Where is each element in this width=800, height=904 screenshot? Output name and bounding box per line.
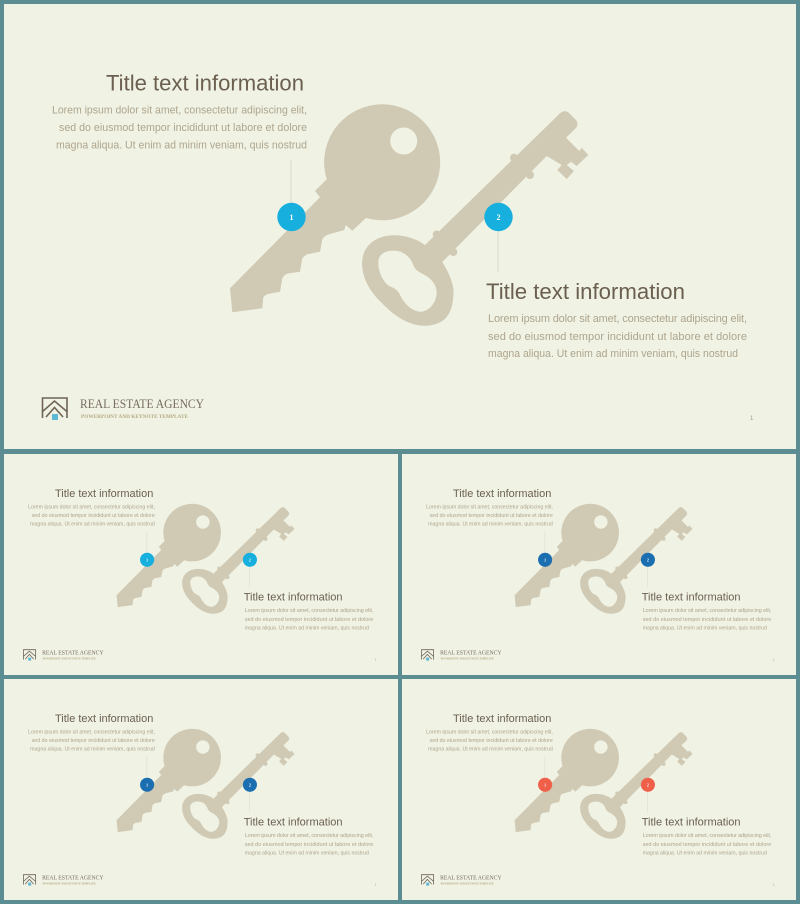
- heading: top left title: Title text information: [453, 713, 551, 725]
- logo: POWERPOINT AND KEYNOTE TEMPLATE: [441, 883, 494, 886]
- text block: bottom right body: magna aliqua. Ut enim ad minim veniam, quis nostrud: [643, 625, 767, 631]
- text block: top left body: [426, 729, 553, 753]
- marker 1: [538, 756, 552, 792]
- text block: bottom right body: magna aliqua. Ut enim ad minim veniam, quis nostrud: [643, 850, 767, 856]
- text block: bottom right body: sed do eiusmod tempor incididunt ut labore et dolore: [245, 616, 373, 622]
- marker 1: [140, 531, 154, 566]
- text block: top left body: Lorem ipsum dolor sit amet, consectetur adipiscing elit,: [28, 729, 155, 735]
- text block: top left body: Lorem ipsum dolor sit amet, consectetur adipiscing elit,: [426, 504, 553, 510]
- marker 2: 2: [496, 213, 500, 222]
- text block: bottom right body: [245, 833, 374, 856]
- text block: bottom right body: Lorem ipsum dolor sit amet, consectetur adipiscing elit,: [245, 607, 374, 613]
- logo: REAL ESTATE AGENCY: [440, 649, 502, 656]
- logo: POWERPOINT AND KEYNOTE TEMPLATE: [43, 657, 96, 660]
- text block: bottom right body: [245, 607, 374, 631]
- icon: modern key: [515, 729, 619, 832]
- marker 2: [641, 778, 655, 812]
- logo: [23, 649, 104, 660]
- marker 1: 1: [544, 557, 546, 562]
- text block: bottom right body: magna aliqua. Ut enim ad minim veniam, quis nostrud: [245, 625, 369, 631]
- text block: bottom right body: magna aliqua. Ut enim ad minim veniam, quis nostrud: [488, 348, 738, 360]
- text block: bottom right body: Lorem ipsum dolor sit amet, consectetur adipiscing elit,: [643, 833, 772, 839]
- panel: slide variant dark blue top: [402, 454, 796, 674]
- text block: top left body: sed do eiusmod tempor incididunt ut labore et dolore: [430, 738, 553, 744]
- heading: top left title: Title text information: [55, 713, 153, 725]
- icon: skeleton key: [580, 507, 693, 613]
- text block: top left body: Lorem ipsum dolor sit amet, consectetur adipiscing elit,: [426, 729, 553, 735]
- logo: [23, 875, 104, 886]
- marker 1: 1: [290, 213, 294, 222]
- text block: bottom right body: [643, 607, 772, 631]
- marker 2: 2: [249, 557, 251, 562]
- page number: 1: [773, 883, 775, 887]
- marker 2: [641, 552, 655, 587]
- text block: bottom right body: Lorem ipsum dolor sit amet, consectetur adipiscing elit,: [245, 833, 374, 839]
- icon: skeleton key: [182, 732, 295, 839]
- marker 2: [484, 203, 513, 231]
- text block: bottom right body: magna aliqua. Ut enim ad minim veniam, quis nostrud: [245, 850, 369, 856]
- marker 2: [243, 552, 257, 587]
- heading: bottom right title: Title text information: [244, 591, 343, 603]
- text block: top left body: magna aliqua. Ut enim ad minim veniam, quis nostrud: [30, 521, 155, 527]
- text block: bottom right body: sed do eiusmod tempor incididunt ut labore et dolore: [643, 616, 771, 622]
- icon: modern key: [117, 729, 221, 832]
- text block: top left body: sed do eiusmod tempor incididunt ut labore et dolore: [32, 738, 155, 744]
- page number: 1: [750, 416, 754, 422]
- logo: REAL ESTATE AGENCY: [440, 875, 502, 882]
- icon: modern key: [515, 503, 619, 607]
- logo: [42, 396, 205, 420]
- text block: bottom right body: Lorem ipsum dolor sit amet, consectetur adipiscing elit,: [488, 313, 747, 325]
- text block: top left body: [52, 104, 307, 152]
- text block: top left body: Lorem ipsum dolor sit amet, consectetur adipiscing elit,: [52, 104, 307, 116]
- marker 2: 2: [647, 782, 649, 787]
- heading: bottom right title: Title text information: [642, 591, 741, 603]
- icon: modern key: [117, 503, 221, 607]
- text block: top left body: magna aliqua. Ut enim ad minim veniam, quis nostrud: [428, 521, 553, 527]
- text block: top left body: magna aliqua. Ut enim ad minim veniam, quis nostrud: [428, 747, 553, 753]
- logo: POWERPOINT AND KEYNOTE TEMPLATE: [43, 883, 96, 886]
- panel: main slide: [4, 4, 796, 449]
- logo: REAL ESTATE AGENCY: [80, 396, 205, 411]
- text block: top left body: Lorem ipsum dolor sit amet, consectetur adipiscing elit,: [28, 504, 155, 510]
- marker 2: [243, 778, 257, 812]
- text block: top left body: [28, 729, 155, 753]
- text block: top left body: sed do eiusmod tempor incididunt ut labore et dolore: [430, 513, 553, 519]
- text block: top left body: magna aliqua. Ut enim ad minim veniam, quis nostrud: [30, 747, 155, 753]
- icon: skeleton key: [182, 507, 295, 613]
- page number: 1: [773, 657, 775, 661]
- icon: skeleton key: [580, 732, 693, 839]
- icon: modern key: [230, 104, 440, 312]
- heading: bottom right title: Title text information: [244, 817, 343, 829]
- logo: REAL ESTATE AGENCY: [42, 649, 104, 656]
- text block: bottom right body: [643, 833, 772, 856]
- marker 1: 1: [146, 557, 148, 562]
- marker 1: [140, 756, 154, 792]
- heading: top left title: Title text information: [453, 488, 551, 500]
- icon: skeleton key: [362, 111, 588, 326]
- text block: bottom right body: Lorem ipsum dolor sit amet, consectetur adipiscing elit,: [643, 607, 772, 613]
- text block: top left body: sed do eiusmod tempor incididunt ut labore et dolore: [32, 513, 155, 519]
- text block: bottom right body: sed do eiusmod tempor incididunt ut labore et dolore: [643, 842, 771, 848]
- text block: top left body: [426, 504, 553, 527]
- marker 1: [538, 531, 552, 566]
- panel: slide variant coral: [402, 679, 796, 900]
- logo: POWERPOINT AND KEYNOTE TEMPLATE: [81, 414, 188, 420]
- text block: top left body: sed do eiusmod tempor incididunt ut labore et dolore: [59, 122, 307, 134]
- heading: top left title: Title text information: [55, 488, 153, 500]
- logo: [421, 875, 502, 886]
- connector: marker 2: [497, 231, 499, 272]
- heading: top left title: Title text information: [106, 71, 304, 96]
- logo: [421, 649, 502, 660]
- marker 1: [277, 203, 306, 231]
- heading: bottom right title: Title text information: [642, 817, 741, 829]
- text block: top left body: [28, 504, 155, 527]
- logo: POWERPOINT AND KEYNOTE TEMPLATE: [441, 657, 494, 660]
- text block: bottom right body: [488, 313, 747, 360]
- panel: slide variant dark blue bottom: [4, 679, 398, 900]
- text block: top left body: magna aliqua. Ut enim ad minim veniam, quis nostrud: [56, 140, 307, 152]
- marker 2: 2: [647, 557, 649, 562]
- logo: REAL ESTATE AGENCY: [42, 875, 104, 882]
- marker 2: 2: [249, 782, 251, 787]
- marker 1: 1: [544, 782, 546, 787]
- panel: slide variant light blue: [4, 454, 398, 674]
- text block: bottom right body: sed do eiusmod tempor incididunt ut labore et dolore: [245, 842, 373, 848]
- connector: marker 1: [290, 160, 292, 204]
- page number: 1: [375, 883, 377, 887]
- text block: bottom right body: sed do eiusmod tempor incididunt ut labore et dolore: [488, 331, 747, 343]
- page number: 1: [375, 657, 377, 661]
- marker 1: 1: [146, 782, 148, 787]
- heading: bottom right title: Title text information: [486, 279, 685, 304]
